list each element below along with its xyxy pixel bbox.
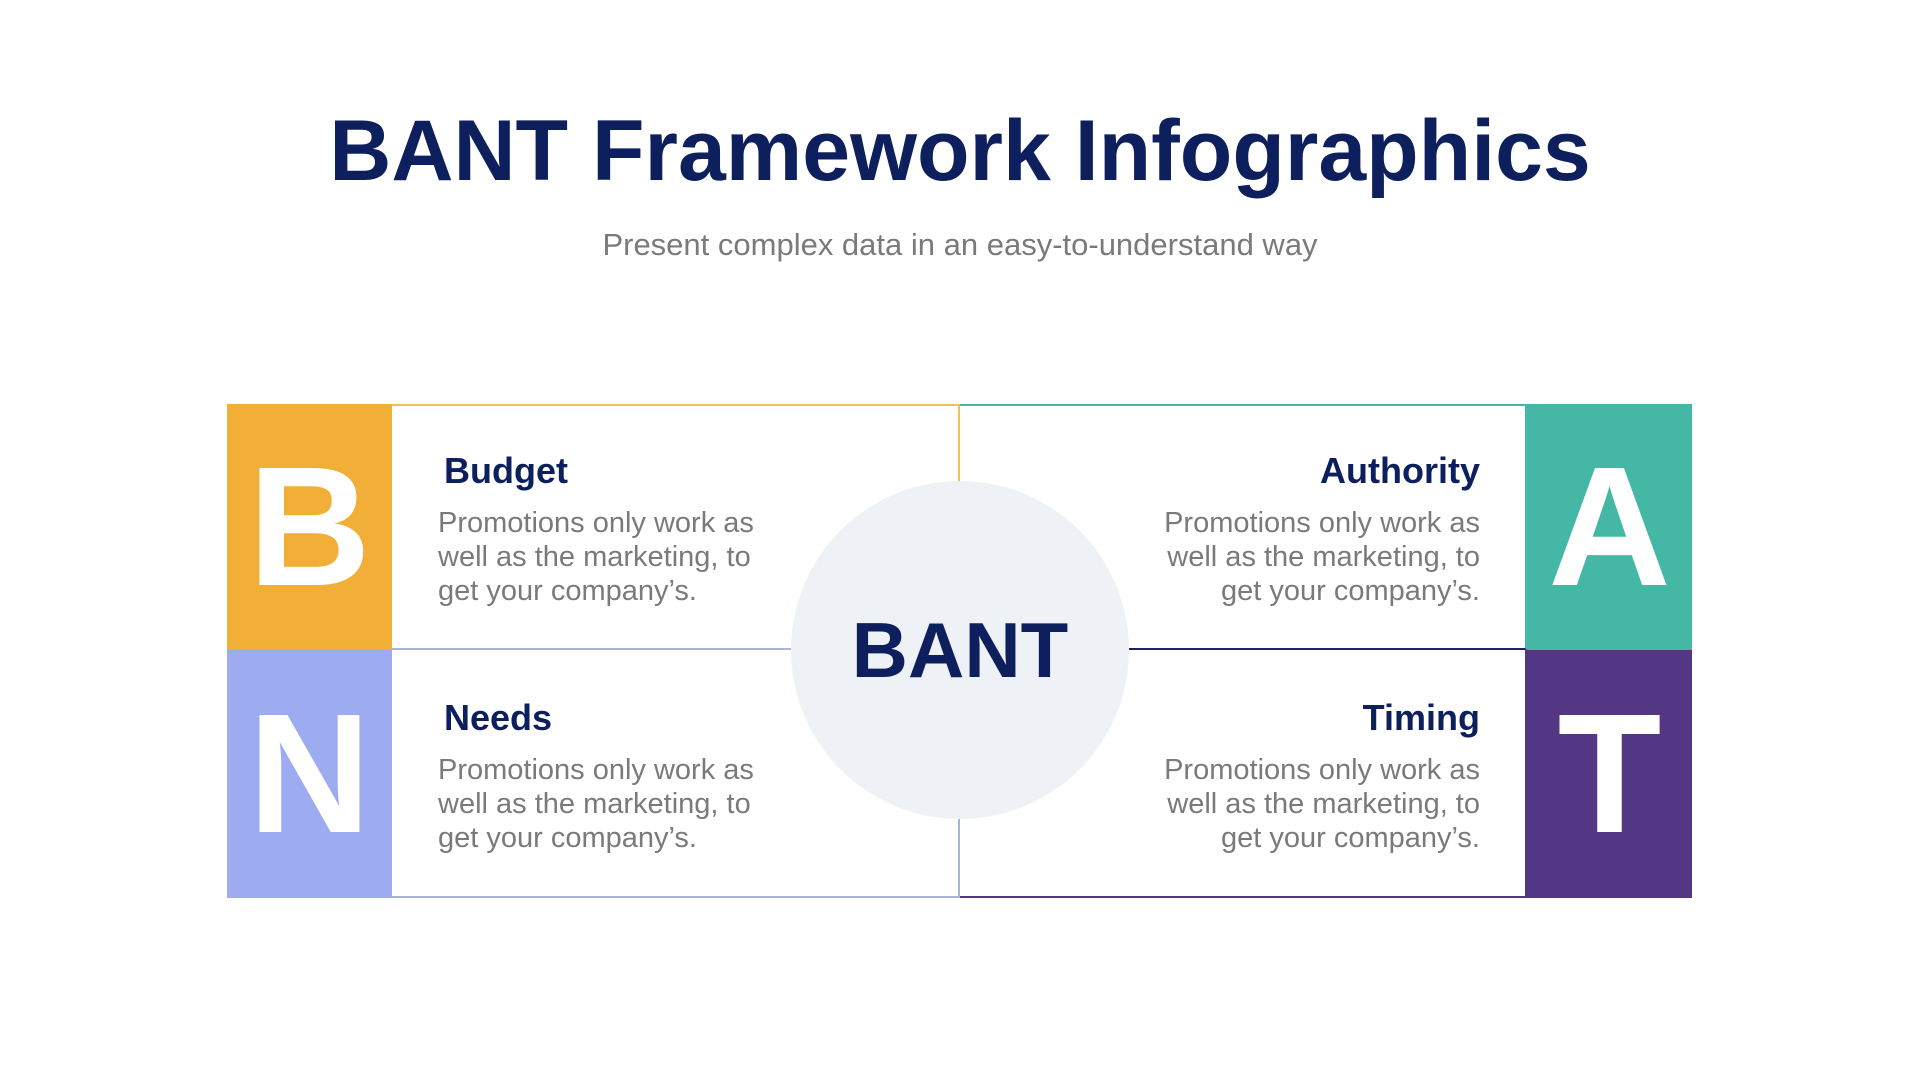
text: needs: Promotions only work as <box>438 754 754 786</box>
text: timing: Timing <box>1363 697 1480 738</box>
text: authority <box>1164 450 1480 607</box>
letter box B: B <box>248 432 371 622</box>
text: budget <box>438 450 754 607</box>
center circle <box>791 481 1129 819</box>
text: needs: get your company’s. <box>438 822 697 854</box>
letter box A <box>1527 404 1692 650</box>
text: needs: Needs <box>444 697 552 738</box>
text: authority: get your company’s. <box>1221 575 1480 607</box>
text: needs <box>438 697 754 854</box>
text: budget: Budget <box>444 450 568 491</box>
text: timing: get your company’s. <box>1221 822 1480 854</box>
letter box N <box>227 650 392 898</box>
text: timing: Promotions only work as <box>1164 754 1480 786</box>
text: timing <box>1164 697 1480 854</box>
panel: timing cell <box>960 650 1527 898</box>
text: authority: Promotions only work as <box>1164 507 1480 539</box>
panel: budget cell <box>392 404 960 650</box>
text: needs: well as the marketing, to <box>438 788 751 820</box>
subtitle: Present complex data in an easy-to-understand way <box>602 227 1318 262</box>
title: BANT Framework Infographics <box>329 103 1591 199</box>
letter box A: A <box>1548 432 1671 622</box>
letter box B <box>227 404 392 650</box>
panel: needs cell <box>392 650 960 898</box>
text: timing: well as the marketing, to <box>1167 788 1480 820</box>
letter box N: N <box>248 679 371 869</box>
letter box T: T <box>1558 679 1661 869</box>
panel: authority cell <box>960 404 1527 650</box>
center circle: BANT <box>852 606 1068 694</box>
text: budget: Promotions only work as <box>438 507 754 539</box>
text: budget: well as the marketing, to <box>438 541 751 573</box>
text: authority: Authority <box>1320 450 1480 491</box>
text: authority: well as the marketing, to <box>1167 541 1480 573</box>
letter box T <box>1527 650 1692 898</box>
text: budget: get your company’s. <box>438 575 697 607</box>
